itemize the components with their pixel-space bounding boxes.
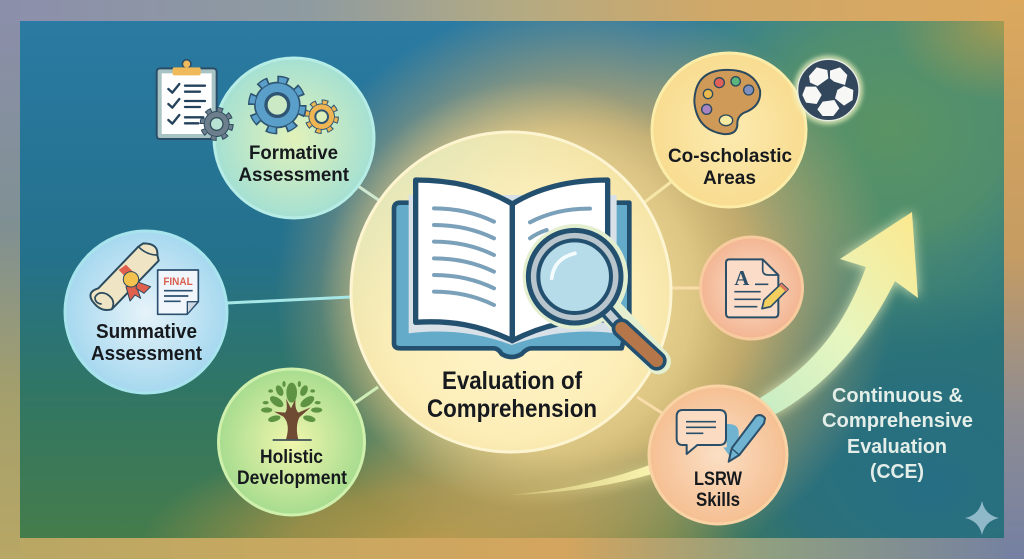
label: continuous and comprehensive evaluation: (CCE) <box>870 461 924 483</box>
icon: soccer ball <box>794 55 863 125</box>
label: continuous and comprehensive evaluation <box>822 385 973 483</box>
panel: formative assessment: Assessment <box>238 164 349 186</box>
icon: open book with magnifying glass <box>394 180 658 362</box>
growth arrow <box>500 212 918 495</box>
icon: gears <box>252 80 336 131</box>
panel: holistic development <box>218 369 364 515</box>
panel: summative assessment <box>65 231 227 393</box>
icon: document with pencil: A <box>734 268 749 290</box>
icon: tree <box>261 381 322 440</box>
panel: formative assessment <box>202 58 374 218</box>
label: evaluation of comprehension: Evaluation of <box>442 367 583 395</box>
icon: paint palette <box>694 70 760 134</box>
label: summative assessment: Summative <box>96 321 197 343</box>
panel: lsrw skills <box>649 386 787 524</box>
panel: written test <box>700 237 802 339</box>
panel: lsrw skills: Skills <box>696 490 740 511</box>
label: co-scholastic areas: Co-scholastic <box>668 145 792 167</box>
label: continuous and comprehensive evaluation: Continuous & <box>832 385 963 407</box>
icon: speech bubbles and pen <box>677 410 765 462</box>
panel: holistic development: Development <box>237 467 347 489</box>
center panel: evaluation of comprehension <box>351 132 671 452</box>
icon: diploma scroll and final paper <box>90 243 198 314</box>
icon: gray gear <box>202 110 231 138</box>
connector lines <box>227 182 701 413</box>
label: formative assessment: Formative <box>249 142 338 164</box>
icon: clipboard checklist <box>157 60 217 139</box>
label: continuous and comprehensive evaluation: Comprehensive <box>822 410 973 432</box>
label: lsrw skills: LSRW <box>694 469 742 490</box>
panel: summative assessment: Assessment <box>91 343 202 365</box>
center panel: evaluation of comprehension: Comprehension <box>427 395 597 423</box>
icon: sparkle <box>965 501 999 535</box>
panel: co-scholastic areas <box>652 53 806 207</box>
label: holistic development: Holistic <box>260 446 323 468</box>
icon: diploma scroll and final paper: FINAL <box>163 276 193 288</box>
panel: co-scholastic areas: Areas <box>703 167 756 189</box>
label: continuous and comprehensive evaluation: Evaluation <box>847 436 947 458</box>
